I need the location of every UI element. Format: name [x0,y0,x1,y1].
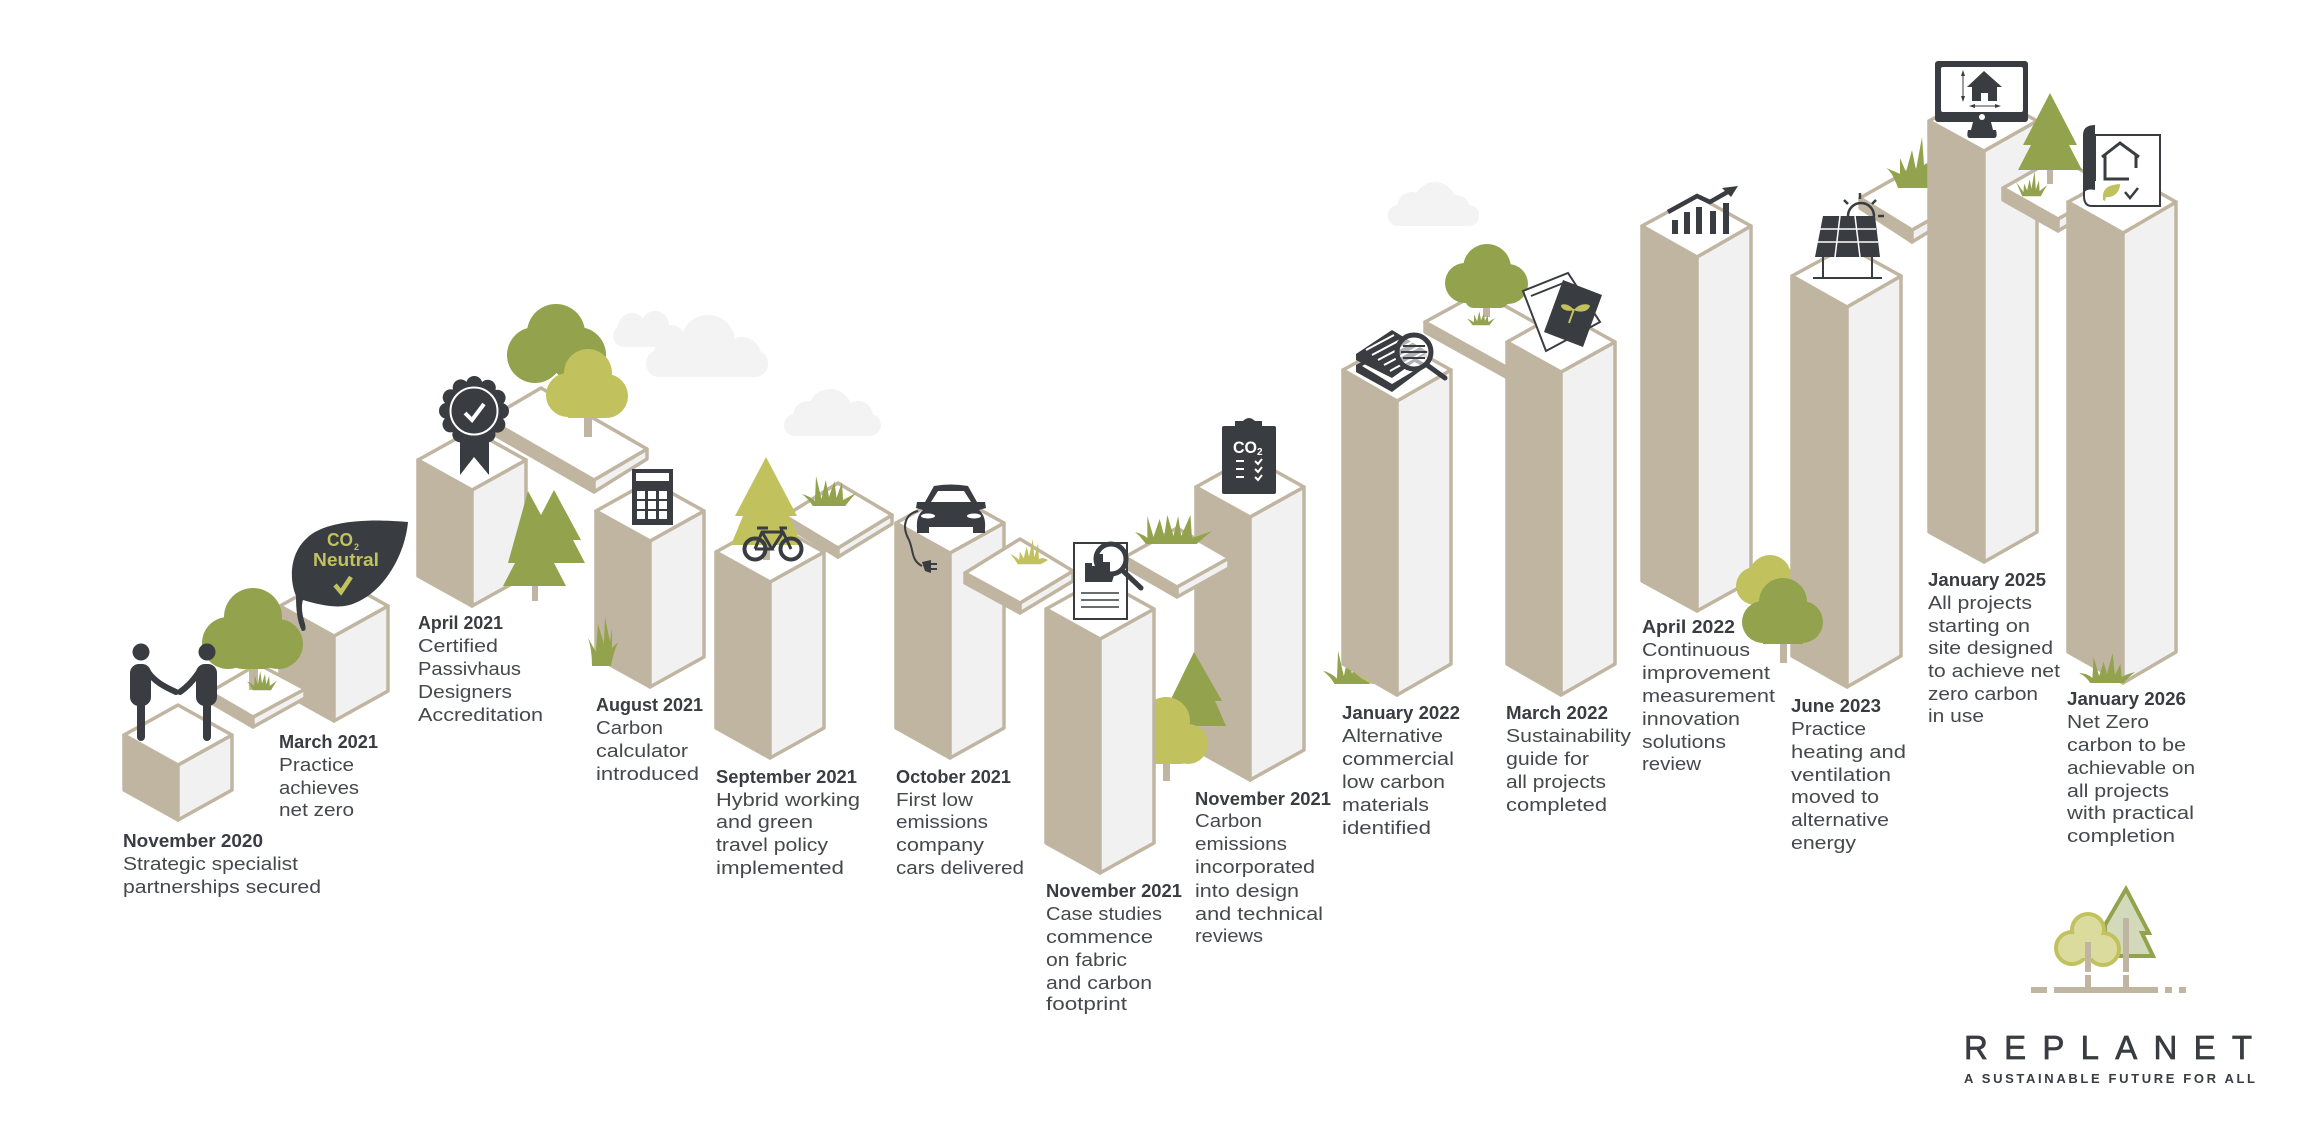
cloud: right [1388,182,1479,226]
text: October 2021: October 2021 [896,767,1011,787]
text: November 2020: partnerships secured [123,876,321,897]
text: November 2021 carbon reviews: November 2021 [1195,789,1331,809]
text: November 2020: November 2020 [123,831,263,851]
text: November 2021 carbon reviews: into design [1195,880,1299,901]
text: June 2023: alternative [1791,809,1889,830]
text: January 2022: January 2022 [1342,703,1460,723]
text: August 2021: introduced [596,763,699,784]
text: April 2022 [1642,617,1775,774]
text: January 2022 [1342,703,1460,838]
icon: CO2 clipboard: 2 [1257,447,1263,458]
grass: January 2025 [1886,137,1932,188]
platform: January 2025 [1860,168,1965,242]
text: January 2025: zero carbon [1928,683,2038,704]
grass: August 2021 [588,617,618,666]
text: August 2021: August 2021 [596,695,703,715]
text: January 2026: Net Zero [2067,711,2149,732]
grass: January 2026 base [2079,653,2135,683]
platform: November 2021 [1125,528,1229,597]
tree: January 2026 conifer [2016,93,2082,196]
tree: March 2022 [1445,244,1528,325]
text: March 2021: Practice [279,754,354,775]
text: March 2021: March 2021 [279,732,378,752]
column: April 2022 [1642,196,1751,611]
text: January 2026: achievable on [2067,757,2195,778]
column: January 2025 [1929,91,2037,562]
text: November 2021 case studies: on fabric [1046,949,1127,970]
text: April 2022: measurement [1642,685,1775,706]
text: November 2021 case studies: footprint [1046,993,1127,1014]
platform: October 2021 [965,539,1073,613]
text: October 2021: emissions [896,811,988,832]
text: November 2021 case studies: and carbon [1046,972,1152,993]
platform: January 2026 [2003,157,2113,231]
column: March 2021 [280,576,388,721]
text: January 2025: All projects [1928,592,2032,613]
text: March 2021 [279,732,378,820]
text: November 2021 carbon reviews: reviews [1195,925,1263,946]
text: June 2023: June 2023 [1791,696,1881,716]
text: November 2021 case studies: November 2021 [1046,881,1182,901]
text: January 2025: to achieve net [1928,660,2060,681]
column: November 2021 carbon reviews [1196,457,1304,780]
icon: electric car [905,484,986,573]
text: November 2021 case studies: commence [1046,926,1153,947]
text: April 2022: Continuous [1642,639,1750,660]
text: January 2022: materials [1342,794,1429,815]
icon: CO2 neutral leaf: 2 [354,542,359,552]
text: March 2022: Sustainability [1506,725,1632,746]
column: April 2021 [418,430,526,606]
icon: handshake figures [130,644,217,741]
text: April 2021: Designers [418,681,512,702]
text: September 2021: implemented [716,857,844,878]
text: April 2022: review [1642,753,1702,774]
cloud: left pair [613,311,768,377]
icon: CO2 clipboard: CO [1233,438,1257,457]
text: April 2022: April 2022 [1642,617,1735,637]
icon: accreditation rosette [446,383,502,475]
text: June 2023: energy [1791,832,1857,853]
text: October 2021: company [896,834,985,855]
text: June 2023: Practice [1791,718,1866,739]
text: September 2021: travel policy [716,834,829,855]
text: September 2021: and green [716,811,813,832]
text: April 2021: Accreditation [418,704,543,725]
text: January 2026 [2066,689,2195,846]
text: November 2020 [123,831,321,897]
text: January 2026: with practical [2066,802,2194,823]
text: June 2023: heating and [1791,741,1906,762]
text: April 2021 [418,613,543,725]
text: January 2026: all projects [2067,780,2169,801]
tree: lime near June 2023 [1736,555,1806,607]
column: March 2022 [1507,312,1615,695]
tree: April 2021 lime [546,349,628,437]
text: March 2022: all projects [1506,771,1606,792]
grass: January 2022 [1323,651,1385,684]
icon: CO2 neutral leaf: CO [327,530,353,550]
column: September 2021 [716,522,824,758]
column: November 2021 case studies [1046,579,1154,873]
column: January 2022 [1343,340,1451,695]
text: April 2022: improvement [1642,662,1770,683]
text: November 2021 case studies [1046,881,1182,1014]
text: January 2026: January 2026 [2067,689,2186,709]
text: August 2021: calculator [596,740,688,761]
text: October 2021: cars delivered [896,857,1024,878]
text: November 2021 carbon reviews [1195,789,1331,946]
text: April 2021: Passivhaus [418,658,521,679]
text: April 2021: Certified [418,635,498,656]
text: March 2021: achieves [279,777,359,798]
text: November 2021 case studies: Case studies [1046,903,1162,924]
text: August 2021: Carbon [596,717,663,738]
icon: rising bar chart [1668,186,1738,234]
text: January 2025: January 2025 [1928,570,2046,590]
text: November 2021 carbon reviews: emissions [1195,833,1287,854]
logo mark: Replanet trees [2031,889,2186,993]
text: March 2021: net zero [279,799,354,820]
grass: October 2021 [1010,539,1048,564]
text: November 2020: Strategic specialist [123,853,298,874]
platform: April 2021 [488,388,647,492]
cloud: middle [784,389,881,436]
text: January 2025: starting on [1928,615,2030,636]
text: January 2026: completion [2067,825,2175,846]
icon: sustainability guide [1523,273,1602,351]
text: November 2021 carbon reviews: Carbon [1195,810,1262,831]
column: June 2023 [1792,246,1901,687]
column: November 2020 [124,705,232,820]
icon: CO2 neutral leaf [292,521,408,631]
tree: September 2021 conifer [731,457,802,560]
logo wordmark: REPLANET [1964,1029,2252,1066]
text: January 2025: in use [1928,705,1984,726]
text: October 2021: First low [896,789,974,810]
text: April 2022: solutions [1642,731,1726,752]
trees: conifers April 2021 [503,490,585,601]
text: March 2022 [1506,703,1632,815]
text: August 2021 [596,695,703,784]
column: August 2021 [596,481,704,687]
platform: September 2021 [785,483,892,557]
platform: March 2022 [1425,292,1570,382]
grass: September 2021 [802,476,856,506]
icon: solar panel [1813,193,1884,278]
text: January 2026: carbon to be [2067,734,2186,755]
icon: CO2 clipboard [1222,418,1276,494]
tree: November 2021 lime [1142,697,1208,781]
tree: olive June 2023 [1742,578,1823,663]
tree: November 2021 conifer [1170,652,1226,726]
text: March 2022: guide for [1506,748,1589,769]
grass: November 2021 [1135,515,1212,544]
text: April 2021: April 2021 [418,613,503,633]
column: January 2026 [2068,172,2176,683]
text: March 2022: March 2022 [1506,703,1608,723]
icon: computer with house drawing [1935,61,2028,138]
tree: March 2021 [202,588,303,690]
text: January 2022: identified [1342,817,1431,838]
icon: materials with magnifier [1356,330,1445,392]
text: April 2022: innovation [1642,708,1740,729]
tree: April 2021 olive [507,304,606,383]
column: October 2021 [896,493,1004,758]
text: January 2022: commercial [1342,748,1454,769]
text: January 2025 [1928,570,2060,726]
text: November 2021 carbon reviews: and technical [1195,903,1323,924]
icon: CO2 neutral leaf: Neutral [313,550,379,570]
text: September 2021: Hybrid working [716,789,860,810]
icon: bicycle [744,528,802,560]
logo tagline: A SUSTAINABLE FUTURE FOR ALL [1964,1071,2255,1086]
text: September 2021: September 2021 [716,767,857,787]
text: October 2021 [896,767,1024,878]
text: September 2021 [716,767,860,878]
icon: report with magnifier [1074,543,1141,619]
text: January 2022: Alternative [1342,725,1443,746]
text: January 2022: low carbon [1342,771,1445,792]
text: June 2023: ventilation [1791,764,1891,785]
platform: March 2021 [210,664,305,727]
text: November 2021 carbon reviews: incorporated [1195,856,1315,877]
icon: blueprint with house [2083,125,2160,206]
icon: calculator [632,469,673,525]
text: June 2023: moved to [1791,786,1879,807]
text: March 2022: completed [1506,794,1607,815]
text: January 2025: site designed [1928,637,2053,658]
text: June 2023 [1791,696,1906,853]
